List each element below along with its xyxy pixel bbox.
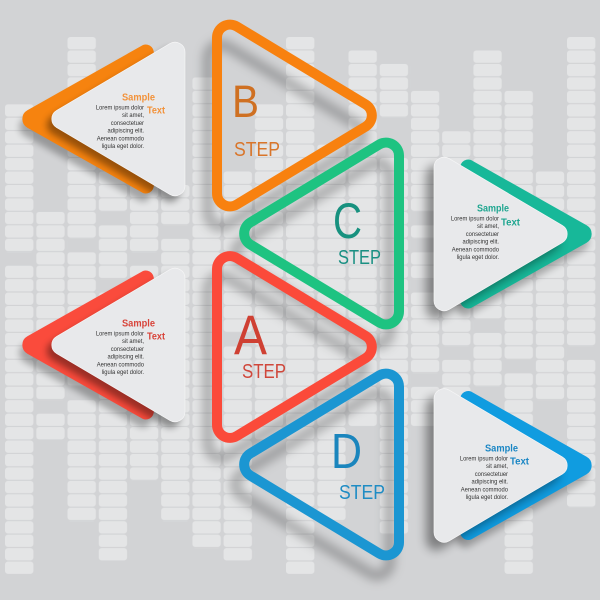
card: blue sample text: adipiscing elit. (471, 478, 508, 486)
card: blue sample text: Lorem ipsum dolor (460, 455, 508, 463)
card: orange sample text: sit amet, (122, 112, 144, 119)
card: blue sample text: consectetuer (475, 471, 508, 478)
card: blue sample text (426, 389, 592, 550)
step D triangle (244, 374, 399, 555)
card: red sample text: ligula eget dolor. (102, 369, 144, 376)
card: orange sample text: ligula eget dolor. (102, 143, 144, 150)
card: orange sample text: Text (147, 106, 166, 116)
card: blue sample text: sit amet, (486, 463, 508, 470)
card: red sample text: Lorem ipsum dolor (96, 330, 144, 338)
card: red sample text: Text (147, 332, 166, 342)
card: teal sample text: Text (501, 218, 521, 228)
card: teal sample text: ligula eget dolor. (457, 254, 499, 261)
step D triangle: D (331, 425, 362, 479)
card: orange sample text: adipiscing elit. (107, 127, 144, 135)
step C triangle (244, 143, 399, 324)
card: red sample text: adipiscing elit. (107, 353, 144, 361)
card: orange sample text: Lorem ipsum dolor (96, 104, 144, 112)
big triangle shadows (208, 45, 390, 575)
step C triangle: STEP (338, 246, 381, 269)
card: blue sample text: Aenean commodo (461, 486, 508, 493)
card: orange sample text: Sample (122, 92, 155, 104)
card: teal sample text: sit amet, (477, 223, 499, 230)
card: red sample text: consectetuer (111, 346, 144, 353)
card: teal sample text: Aenean commodo (452, 246, 499, 253)
card: red sample text: Sample (122, 318, 155, 330)
step A triangle: A (234, 303, 268, 366)
step A triangle (217, 256, 372, 438)
card: blue sample text: Text (510, 456, 530, 468)
card: orange sample text (19, 42, 185, 202)
card: red sample text: Aenean commodo (97, 361, 144, 368)
card: teal sample text: Sample (477, 204, 509, 214)
card: teal sample text: adipiscing elit. (462, 238, 499, 246)
card: blue sample text: Sample (485, 444, 518, 454)
step D triangle: STEP (339, 481, 385, 504)
card: teal sample text (426, 157, 592, 319)
card: orange sample text: Aenean commodo (97, 135, 144, 142)
card: red sample text (19, 268, 185, 428)
card: teal sample text: consectetuer (466, 231, 499, 238)
step A triangle: STEP (242, 360, 286, 383)
card: red sample text: sit amet, (122, 338, 144, 345)
card: orange sample text: consectetuer (111, 120, 144, 127)
card: blue sample text: ligula eget dolor. (466, 494, 508, 501)
step C triangle: C (333, 193, 362, 249)
step B triangle: B (232, 76, 259, 127)
step B triangle: STEP (234, 138, 280, 161)
step B triangle (217, 25, 372, 206)
card: teal sample text: Lorem ipsum dolor (451, 215, 499, 223)
